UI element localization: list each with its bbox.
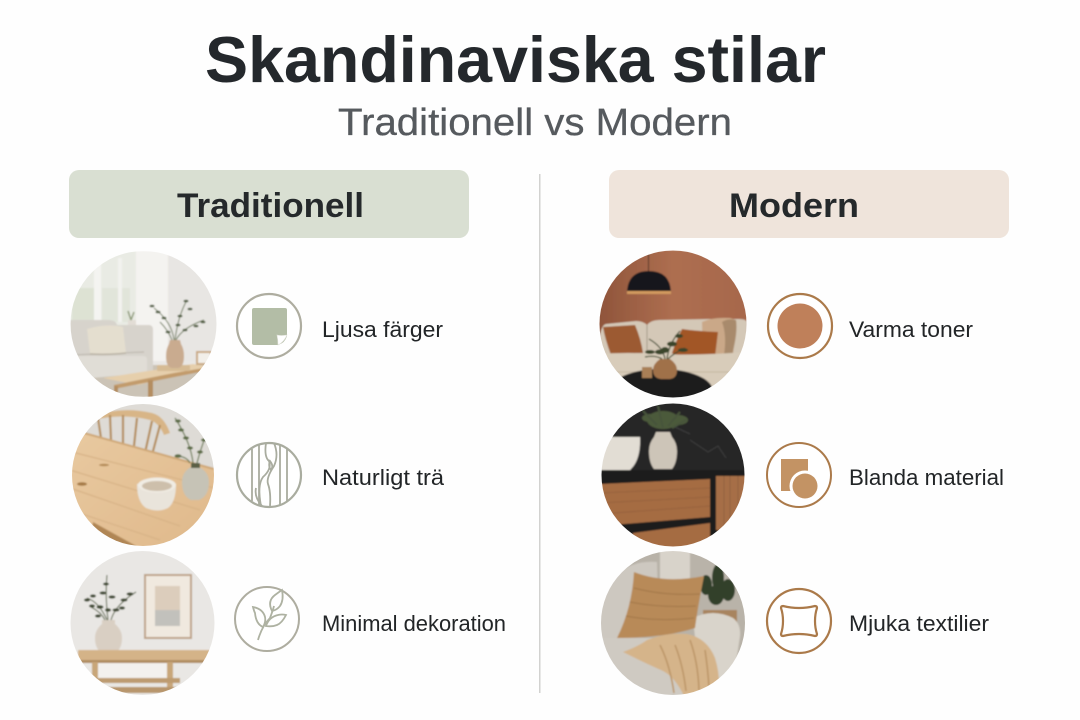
subtitle: Traditionell vs Modern (338, 102, 732, 144)
photo: warm living room (600, 250, 746, 398)
title: Skandinaviska stilar (205, 23, 826, 96)
label: Naturligt trä: Naturligt trä (322, 465, 445, 490)
icon: warm tone circle (768, 294, 832, 358)
header: Traditionell (69, 170, 469, 238)
label: Mjuka textilier: Mjuka textilier (849, 611, 989, 636)
photo: soft textiles (598, 550, 748, 698)
icon: soft textile pillow (767, 589, 831, 653)
label: Blanda material: Blanda material (849, 465, 1004, 490)
label: Minimal dekoration: Minimal dekoration (322, 611, 506, 636)
icon: light colour swatch (237, 294, 301, 358)
photo: bright living room (70, 251, 218, 398)
icon: wood grain (237, 443, 301, 507)
header: Traditionell: Traditionell (177, 187, 364, 225)
header: Modern (609, 170, 1009, 238)
label: Ljusa färger: Ljusa färger (322, 317, 443, 342)
photo: minimal decoration (69, 550, 217, 698)
photo: natural wood table (70, 402, 216, 548)
header: Modern: Modern (729, 187, 859, 225)
icon: leaf sprig (235, 587, 299, 651)
photo: mixed materials (600, 402, 746, 549)
icon: mixed materials (767, 443, 831, 507)
label: Varma toner: Varma toner (849, 317, 973, 342)
